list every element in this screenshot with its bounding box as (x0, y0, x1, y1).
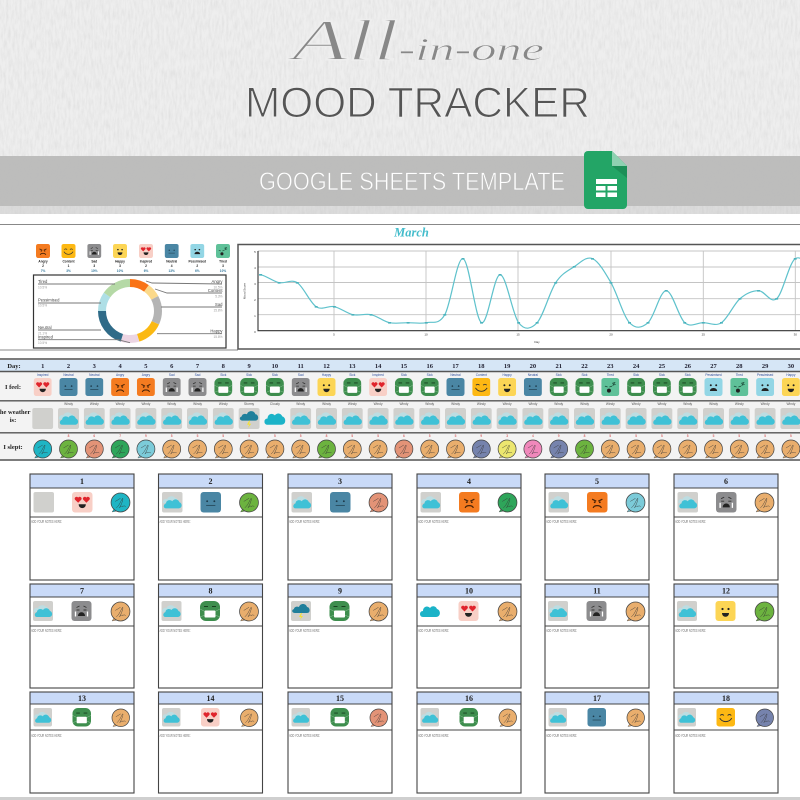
label: tired (38, 279, 48, 290)
legend: neutral: 4 (171, 264, 173, 268)
day 17 (445, 363, 466, 458)
day 17: Neutral (450, 373, 461, 377)
day 4: 7 (119, 434, 121, 438)
day 1 (32, 363, 53, 458)
day 29: Windy (761, 402, 770, 406)
day 24: 24 (633, 363, 640, 370)
header: paper background (0, 0, 800, 214)
legend: angry: 2 (42, 264, 44, 268)
card: day 9: ADD YOUR NOTES HERE: (289, 628, 320, 633)
card: day 17: ADD YOUR NOTES HERE: (546, 733, 577, 738)
card: day 6: ADD YOUR NOTES HERE: (675, 519, 706, 524)
legend: neutral: Neutral (166, 260, 177, 264)
card: day 2: 2 (208, 477, 212, 486)
card: day 18 (674, 692, 778, 793)
chart: axis labels: Day (534, 340, 540, 344)
day 28: Windy (735, 402, 744, 406)
card: day 12: 12 (722, 586, 730, 596)
label: sad: Sad (215, 302, 223, 307)
day 28: Tired (736, 373, 743, 377)
day 15: 6 (403, 434, 405, 438)
day 2 (58, 363, 79, 458)
day 21: Windy (554, 402, 564, 406)
day 11: Windy (296, 402, 306, 406)
day 2: 2 (67, 363, 70, 370)
legend: inspired: 6% (144, 269, 148, 273)
day 6: Sad (169, 373, 175, 377)
card: day 14 (158, 692, 262, 793)
day 19 (497, 363, 518, 458)
day 6: Windy (167, 402, 177, 406)
card: day 13: ADD YOUR NOTES HERE: (31, 733, 62, 738)
day 21 (548, 363, 569, 458)
day 5: 5 (144, 363, 148, 370)
day 6: 5 (171, 434, 173, 438)
card: day 14: ADD YOUR NOTES HERE: (160, 733, 190, 738)
day 3: 6 (93, 434, 95, 438)
day 5: Angry (142, 373, 150, 377)
card: day 16: 16 (465, 694, 473, 703)
day 27: 5 (713, 434, 715, 438)
legend: tired: 3 (222, 264, 224, 268)
card: day 15 (288, 692, 392, 793)
day 14: Inspired (372, 373, 384, 377)
day 12: 12 (323, 363, 330, 370)
legend: happy: Happy (115, 260, 125, 264)
day 11: Sad (298, 373, 304, 377)
legend: content (62, 244, 76, 273)
day 2: Neutral (63, 373, 74, 377)
day 5 (135, 363, 156, 458)
label: inspired (38, 334, 54, 345)
day 14: 5 (377, 434, 379, 438)
card: day 17 (545, 692, 649, 793)
chart: axis labels: 2 (254, 298, 256, 302)
day 17: 5 (455, 434, 457, 438)
chart: axis labels: 3 (254, 282, 256, 286)
day 24: 5 (635, 434, 637, 438)
day 4: Angry (116, 373, 125, 377)
card: day 1 (30, 474, 134, 580)
card: day 7 (30, 584, 134, 688)
card: day 1: 1 (80, 477, 84, 486)
day 10: 10 (272, 363, 278, 370)
day 12 (316, 363, 337, 458)
card: day 12: ADD YOUR NOTES HERE: (675, 628, 706, 633)
chart: axis labels: 5 (333, 332, 335, 336)
day 16: Sick (427, 373, 433, 377)
day 13: Windy (348, 402, 357, 406)
day 5: 9 (145, 434, 147, 438)
card: day 4 (417, 474, 521, 580)
day 26: Windy (683, 402, 693, 406)
day 7: Sad (195, 373, 201, 377)
day 7: 5 (197, 434, 199, 438)
label: tired: Tired (38, 279, 48, 284)
day 25: 25 (659, 363, 666, 370)
card: day 6 (674, 474, 778, 580)
day 1: Inspired (37, 373, 49, 377)
card: day 8: 8 (208, 586, 212, 596)
chart: axis labels: 0 (254, 330, 256, 334)
day 30: Happy (786, 373, 796, 377)
day 16 (419, 363, 440, 458)
label: inspired: Inspired (38, 334, 54, 340)
day 25 (651, 363, 672, 458)
day 22: 22 (581, 363, 588, 370)
card: day 8 (158, 584, 262, 688)
day 3: Neutral (89, 373, 100, 377)
day 28: 5 (738, 434, 740, 438)
card: day 8: ADD YOUR NOTES HERE: (160, 628, 190, 633)
chart: axis labels: 20 (609, 332, 613, 336)
day 17: Windy (451, 402, 460, 406)
chart: axis labels: 25 (702, 332, 705, 336)
row label: I slept: I slept: (3, 444, 23, 451)
card: day 5: ADD YOUR NOTES HERE: (546, 519, 577, 524)
chart: axis labels: 1 (254, 314, 256, 318)
card: day 6: 6 (724, 477, 728, 486)
day 7: 7 (196, 363, 200, 370)
legend: content: 1 (68, 264, 70, 268)
sheet: white background (0, 214, 800, 797)
day 28 (729, 363, 750, 458)
legend: tired: 10% (220, 269, 226, 273)
day 18: Windy (477, 402, 486, 406)
panel: mood legend (36, 244, 230, 273)
day 4 (110, 363, 131, 458)
label: angry: 10.5% (213, 286, 223, 290)
legend: angry (36, 244, 50, 273)
day 8: 8 (222, 363, 226, 370)
card: day 10: 10 (465, 586, 473, 596)
card: day 18: ADD YOUR NOTES HERE: (675, 733, 706, 738)
day 19: Windy (503, 402, 512, 406)
day 21: Sick (556, 373, 562, 377)
card: day 5 (545, 474, 649, 580)
day 23: Windy (606, 402, 615, 406)
day 22: Windy (580, 402, 589, 406)
day 30: 5 (790, 434, 792, 438)
day 20: Neutral (528, 373, 538, 377)
legend: inspired (139, 244, 153, 273)
day 26: 26 (684, 363, 692, 370)
label: angry (212, 279, 223, 290)
day 23: Tired (607, 373, 614, 377)
legend: tired: Tired (219, 260, 227, 264)
day 29: 5 (764, 434, 766, 438)
title: MOOD TRACKER: MOOD TRACKER (245, 79, 590, 127)
day 6 (161, 363, 182, 458)
chart: axis labels (242, 250, 797, 344)
card: day 3 (288, 474, 392, 580)
day 29 (755, 363, 776, 458)
day 15: Windy (399, 402, 409, 406)
legend: angry: Angry (38, 260, 48, 264)
day 26 (677, 363, 698, 458)
row label: I feel: I feel: (5, 384, 21, 391)
chart: leader lines (38, 281, 222, 343)
day 17: 17 (452, 363, 460, 370)
chart: axis labels: Mood Score (242, 283, 246, 299)
day 13: 13 (349, 363, 356, 370)
day 10: Cloudy (270, 402, 280, 406)
day 10: 5 (274, 434, 276, 438)
legend: neutral (165, 244, 179, 273)
legend: content: Content (62, 260, 75, 264)
card: day 11: 11 (593, 586, 601, 596)
day 14: 14 (375, 363, 382, 370)
day 28: 28 (736, 363, 743, 370)
day 29: Pessimised (757, 373, 773, 377)
legend: pessimised (189, 244, 206, 273)
card: day 3: 3 (338, 477, 342, 486)
card: day 15: 15 (336, 694, 344, 703)
chart: axis labels: 30 (794, 332, 797, 336)
chart: axis labels: 4 (254, 266, 256, 270)
day 27 (703, 363, 724, 458)
legend: inspired: 2 (145, 264, 147, 268)
card: day 16: ADD YOUR NOTES HERE: (418, 733, 449, 738)
day 19: 3 (506, 434, 508, 438)
day 12: Windy (322, 402, 331, 406)
day 25: Windy (657, 402, 667, 406)
day 4: 4 (118, 363, 122, 370)
card: day 11 (545, 584, 649, 688)
label: pessimised: Pessimised (38, 298, 60, 302)
legend: sad (87, 244, 101, 273)
day 10 (264, 363, 285, 458)
day 16: 5 (429, 434, 431, 438)
legend: inspired: Inspired (140, 260, 152, 264)
legend: pessimised: 6% (195, 269, 200, 273)
card: day 2 (158, 474, 262, 580)
panel: daily strip rows (0, 358, 800, 461)
label: content: Content (208, 288, 223, 293)
day 7: Windy (193, 402, 202, 406)
label: happy (210, 328, 223, 339)
day 12: 8 (326, 434, 328, 438)
day 24: Sick (633, 373, 640, 377)
day 8: 5 (222, 434, 224, 438)
day 24: Windy (632, 402, 641, 406)
day 30: 30 (788, 363, 794, 370)
day 26: Sick (685, 373, 691, 377)
icon: Google Sheets (584, 151, 627, 209)
row label: the weather is: is: (10, 417, 16, 424)
label: neutral: Neutral (38, 325, 52, 330)
day 20: Windy (528, 402, 538, 406)
card: day 7: ADD YOUR NOTES HERE: (31, 628, 62, 633)
day 15: Sick (401, 373, 407, 377)
legend: sad: Sad (91, 260, 97, 264)
day 18: 9 (480, 434, 482, 438)
chart: axes (258, 251, 800, 331)
heading: March: March (393, 226, 429, 240)
label: pessimised: 10.5% (38, 304, 47, 308)
panel: line chart (238, 244, 800, 349)
day 7 (187, 363, 208, 458)
card: day 14: 14 (206, 694, 214, 703)
label: content: 5.3% (215, 294, 223, 298)
chart: mood score line (260, 258, 800, 328)
day 22: 8 (584, 434, 586, 438)
day 25: 5 (661, 434, 663, 438)
day 21: 21 (555, 363, 562, 370)
day 15: 15 (401, 363, 408, 370)
legend: sad: 10% (91, 269, 98, 273)
chart: axis labels: 15 (516, 332, 520, 336)
day 3 (84, 363, 105, 458)
card: day 16 (417, 692, 521, 793)
label: happy: 15.8% (213, 335, 223, 339)
card: day 7: 7 (80, 586, 84, 596)
day 9: Sick (246, 373, 253, 377)
card: day 13 (30, 692, 134, 793)
day 27: Windy (709, 402, 718, 406)
label: pessimised (38, 298, 60, 308)
footer: paper strip (0, 797, 800, 800)
day 15 (393, 363, 414, 458)
chart: axis labels: 5 (254, 250, 256, 254)
card: day 11: ADD YOUR NOTES HERE: (546, 628, 577, 633)
day 13: 5 (351, 434, 353, 438)
day 3: Windy (90, 402, 99, 406)
legend: happy: 3 (119, 264, 121, 268)
day 18: Content (476, 373, 487, 377)
label: neutral (38, 325, 52, 336)
day 8: Sick (220, 373, 227, 377)
card: day 15: ADD YOUR NOTES HERE: (289, 733, 320, 738)
day 3: 3 (93, 363, 97, 370)
legend: neutral: 13% (169, 269, 175, 273)
legend: sad: 3 (93, 264, 95, 268)
card: day 1: ADD YOUR NOTES HERE: (31, 519, 62, 524)
day 25: Sick (659, 373, 665, 377)
day 5: Windy (141, 402, 151, 406)
chart: grid (258, 251, 800, 331)
label: happy: Happy (210, 328, 223, 334)
day 11 (290, 363, 311, 458)
row label: day: Day: (7, 363, 21, 370)
chart: donut segments (102, 283, 158, 339)
day 30: Windy (786, 402, 796, 406)
day 20: 4 (532, 434, 534, 438)
day 13: Sick (349, 373, 356, 377)
script title: All-in-one: All -in-one (286, 8, 544, 73)
day 19: Happy (502, 373, 512, 377)
day 20: 20 (530, 363, 536, 370)
day 30 (780, 363, 800, 458)
day 6: 6 (170, 363, 174, 370)
card: day 9: 9 (338, 586, 342, 596)
day 9: 5 (248, 434, 250, 438)
day 4: Windy (116, 402, 125, 406)
day 26: 5 (687, 434, 689, 438)
card: day 13: 13 (78, 694, 86, 703)
day 11: 5 (300, 434, 302, 438)
label: inspired: 10.5% (38, 341, 47, 345)
day 24 (626, 363, 647, 458)
card: day 2: ADD YOUR NOTES HERE: (160, 519, 190, 524)
day 16: 16 (426, 363, 434, 370)
legend: happy: 10% (117, 269, 123, 273)
day 2: Windy (64, 402, 73, 406)
day 2: 8 (68, 434, 70, 438)
legend: angry: 7% (41, 269, 45, 273)
day 8: Windy (219, 402, 228, 406)
label: tired: 10.5% (38, 286, 47, 290)
subtitle: Google Sheets template: GOOGLE SHEETS TEMPLATE (259, 168, 565, 196)
day 14 (368, 363, 389, 458)
label: neutral: 21.1% (38, 332, 47, 336)
day 13 (342, 363, 363, 458)
chart: axis labels: 10 (424, 332, 428, 336)
card: day 4: 4 (467, 477, 471, 486)
day 23 (600, 363, 621, 458)
card: day 18: 18 (722, 694, 730, 703)
legend: pessimised: Pessimised (189, 260, 206, 264)
day 20 (522, 363, 543, 458)
day 21: 9 (558, 434, 560, 438)
day 9: Stormy (244, 402, 255, 406)
day 18: 18 (478, 363, 485, 370)
day 9 (239, 363, 260, 458)
legend: happy (113, 244, 127, 273)
day 1: 1 (41, 363, 44, 370)
legend: tired (216, 244, 230, 273)
label: angry: Angry (212, 279, 223, 284)
label: content (208, 288, 223, 298)
day 27: Pessimised (705, 373, 722, 377)
day 23: 23 (607, 363, 614, 370)
day 14: Windy (374, 402, 383, 406)
day 18 (471, 363, 492, 458)
day 9: 9 (247, 363, 251, 370)
day 27: 27 (710, 363, 718, 370)
label: sad: 15.8% (213, 308, 223, 312)
legend: pessimised: 2 (196, 264, 198, 268)
label: sad (213, 302, 223, 312)
panel: donut chart (34, 275, 226, 348)
card: day 4: ADD YOUR NOTES HERE: (418, 519, 449, 524)
card: day 10 (417, 584, 521, 688)
day 23: 5 (609, 434, 611, 438)
card: day 12 (674, 584, 778, 688)
card: day 17: 17 (593, 694, 601, 703)
day 22: Sick (581, 373, 588, 377)
day 12: Happy (322, 373, 332, 377)
card: day 3: ADD YOUR NOTES HERE: (289, 519, 320, 524)
day 11: 11 (298, 363, 304, 370)
card: day 10: ADD YOUR NOTES HERE: (418, 628, 449, 633)
card: day 9 (288, 584, 392, 688)
legend: content: 3% (66, 269, 71, 273)
day 10: Sick (272, 373, 278, 377)
day 22 (574, 363, 595, 458)
day 8 (213, 363, 234, 458)
day 29: 29 (762, 363, 769, 370)
day 16: Windy (425, 402, 435, 406)
card: day 5: 5 (595, 477, 599, 486)
day 19: 19 (504, 363, 511, 370)
